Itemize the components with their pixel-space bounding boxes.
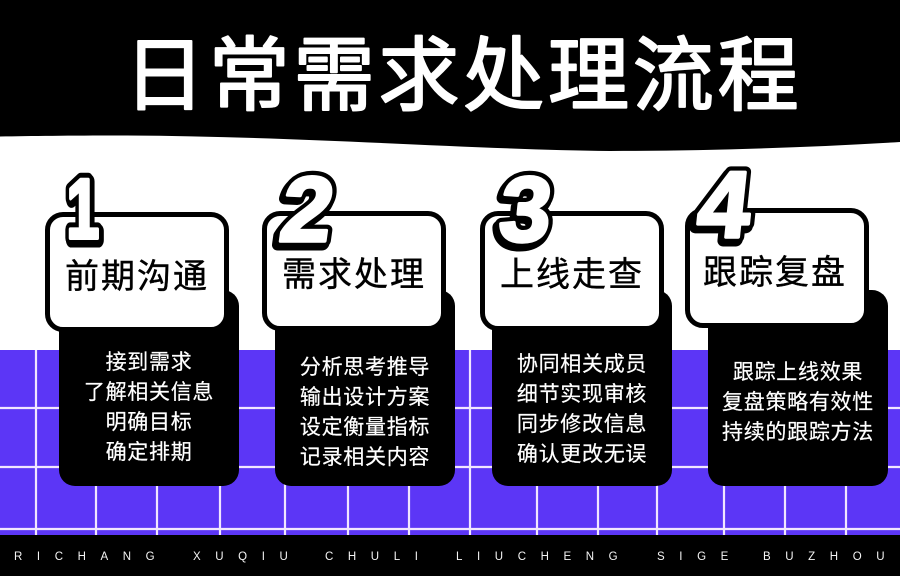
footer text: LIUCHENG	[456, 551, 650, 563]
icon: number 2: 2	[275, 157, 340, 261]
step 4	[685, 152, 888, 486]
icon: number 4: 4	[693, 152, 756, 257]
footer text: RICHANG	[14, 551, 187, 563]
panel: step 4 details	[708, 290, 888, 486]
panel: step 3 details	[492, 290, 672, 486]
icon: number 2: 2	[275, 157, 340, 261]
footer bar	[0, 535, 900, 576]
footer text: XUQIU	[193, 551, 320, 563]
panel: step 2 details	[275, 290, 455, 486]
text: step 1 details: 接到需求	[106, 351, 192, 374]
text: step 1 details: 确定排期	[106, 441, 192, 464]
heading: 上线走查: 上线走查	[500, 256, 644, 294]
text: step 1 details	[84, 351, 214, 464]
text: step 4 details: 复盘策略有效性	[722, 391, 874, 414]
icon: number 4: 4	[693, 152, 756, 257]
text: step 1 details: 明确目标	[106, 411, 192, 434]
text: step 2 details	[300, 356, 430, 469]
text: step 3 details	[517, 353, 647, 466]
step 2	[262, 157, 455, 486]
text: step 2 details: 输出设计方案	[300, 386, 430, 409]
text: step 4 details	[722, 360, 874, 444]
icon: number 2: 2	[273, 160, 338, 264]
text: step 3 details: 协同相关成员	[517, 353, 647, 376]
card: step 3 heading	[480, 211, 664, 331]
icon: number 1: 1	[66, 163, 99, 257]
text: step 1 details: 了解相关信息	[84, 381, 214, 404]
footer text: BUZHOU	[763, 551, 899, 563]
text: step 2 details: 分析思考推导	[300, 356, 430, 379]
text: step 3 details: 同步修改信息	[517, 413, 647, 436]
text: step 2 details: 设定衡量指标	[300, 416, 430, 439]
text: step 2 details: 记录相关内容	[300, 446, 430, 469]
icon: number 1: 1	[67, 165, 100, 259]
footer text: CHULI	[325, 551, 450, 563]
text: step 4 details: 跟踪上线效果	[733, 361, 863, 384]
purple grid background	[0, 350, 900, 535]
icon: number 3: 3	[495, 157, 557, 261]
step 1	[45, 163, 239, 486]
icon: number 4: 4	[691, 155, 754, 260]
panel: step 1 details	[59, 290, 239, 486]
footer text: SIGE	[657, 551, 761, 563]
card: step 4 heading	[685, 208, 869, 328]
text: step 4 details: 持续的跟踪方法	[722, 421, 874, 444]
footer text	[14, 551, 899, 563]
icon: number 3: 3	[493, 160, 555, 264]
text: step 3 details: 细节实现审核	[517, 383, 647, 406]
step 3	[480, 157, 672, 486]
header band	[0, 0, 900, 151]
heading: 跟踪复盘: 跟踪复盘	[703, 254, 847, 292]
heading: 需求处理: 需求处理	[282, 256, 426, 294]
title: 日常需求处理流程	[124, 32, 802, 122]
text: step 3 details: 确认更改无误	[517, 443, 647, 466]
icon: number 1: 1	[66, 163, 99, 257]
card: step 1 heading	[45, 212, 229, 332]
card: step 2 heading	[262, 211, 446, 331]
icon: number 3: 3	[495, 157, 557, 261]
heading: 前期沟通: 前期沟通	[65, 258, 209, 296]
